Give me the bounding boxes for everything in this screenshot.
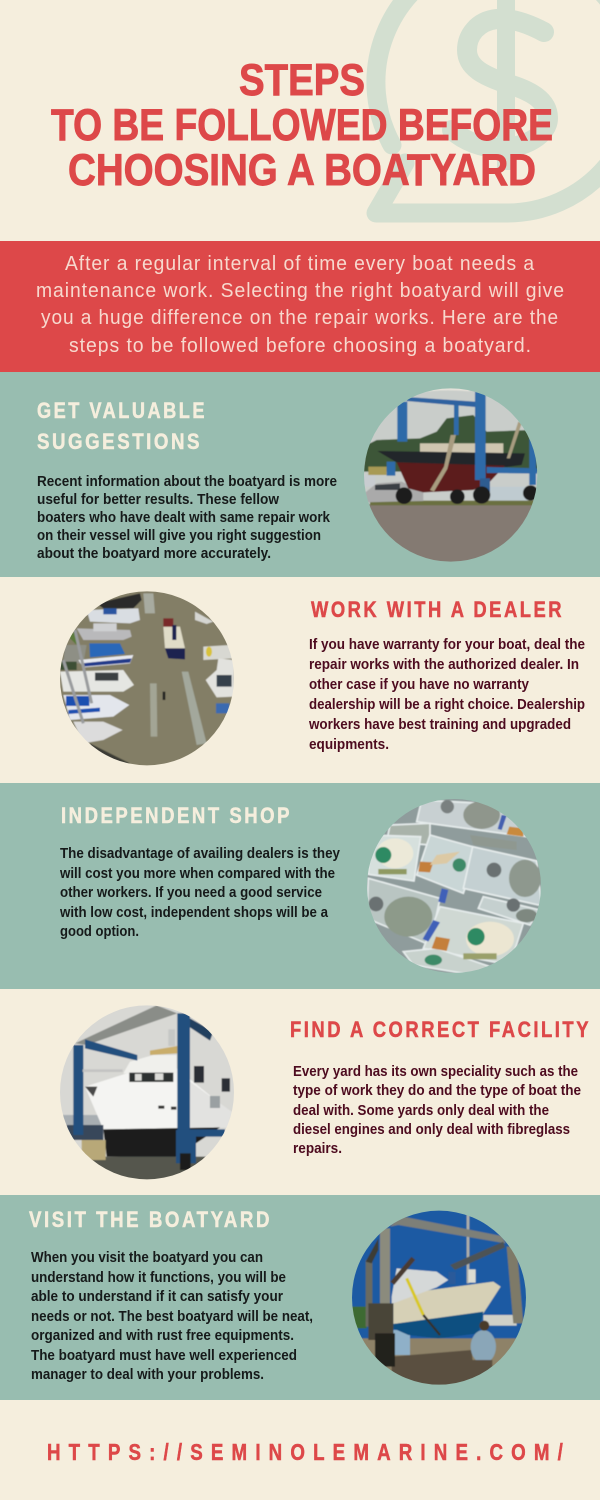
heading: SUGGESTIONS — [37, 429, 202, 454]
body text — [308, 637, 585, 753]
body text: When you visit the boatyard you can — [31, 1250, 263, 1266]
photo: boat on blue lift — [360, 385, 543, 568]
panel: intro — [0, 241, 600, 372]
body text: The disadvantage of availing dealers is they — [60, 846, 340, 862]
body text: If you have warranty for your boat, deal the — [309, 637, 585, 653]
body text: Every yard has its own speciality such as the — [293, 1064, 578, 1080]
body text: needs or not. The best boatyard will be neat, — [31, 1309, 313, 1325]
intro text: After a regular interval of time every boat needs a — [65, 252, 535, 275]
body text: Recent information about the boatyard is more — [37, 474, 337, 490]
icon: dollar speech bubble — [376, 0, 600, 213]
body text: deal with. Some yards only deal with the — [293, 1103, 549, 1119]
panel: independent shop — [0, 783, 600, 989]
body text: repair works with the authorized dealer. In — [309, 657, 579, 673]
intro text: maintenance work. Selecting the right boatyard will give — [36, 279, 565, 302]
title: STEPS — [239, 56, 365, 105]
body text: other workers. If you need a good service — [60, 885, 322, 901]
intro text: steps to be followed before choosing a boatyard. — [69, 334, 532, 357]
photo: aerial view of boatyard — [57, 588, 237, 768]
intro text: you a huge difference on the repair works. Here are the — [41, 306, 559, 329]
intro text — [36, 252, 565, 357]
photo: white motor yacht in lift — [60, 1006, 234, 1180]
heading: GET VALUABLE — [37, 398, 207, 423]
body text: The boatyard must have well experienced — [31, 1348, 297, 1364]
panel: work with a dealer — [60, 591, 584, 766]
body text: boaters who have dealt with same repair work — [37, 510, 331, 526]
title: CHOOSING A BOATYARD — [68, 146, 536, 195]
panel: visit the boatyard — [0, 1195, 600, 1400]
heading — [37, 398, 207, 454]
panel: get valuable suggestions — [0, 372, 600, 577]
body text: with low cost, independent shops will be a — [59, 905, 329, 921]
body text: repairs. — [293, 1141, 342, 1157]
body text: good option. — [60, 924, 139, 940]
heading: VISIT THE BOATYARD — [29, 1207, 272, 1232]
body text — [37, 474, 337, 562]
body text: diesel engines and only deal with fibreglass — [293, 1122, 570, 1138]
body text: about the boatyard more accurately. — [37, 546, 271, 562]
panel: find a correct facility — [60, 1006, 588, 1180]
body text: organized and with rust free equipments. — [31, 1328, 294, 1344]
body text: workers have best training and upgraded — [308, 717, 571, 733]
photo: yacht on slings with man watching — [350, 1208, 532, 1388]
body text: equipments. — [309, 737, 389, 753]
title — [51, 56, 553, 195]
body text — [293, 1064, 581, 1157]
body text — [31, 1250, 313, 1383]
body text: type of work they do and the type of boat the — [293, 1083, 581, 1099]
heading: INDEPENDENT SHOP — [61, 803, 292, 828]
body text: useful for better results. These fellow — [37, 492, 280, 508]
body text: able to understand if it can satisfy your — [31, 1289, 283, 1305]
body text: manager to deal with your problems. — [31, 1367, 264, 1383]
body text — [59, 846, 340, 940]
body text: understand how it functions, you will be — [31, 1270, 286, 1286]
photo: hundred dollar bills — [365, 797, 545, 977]
body text: will cost you more when compared with the — [59, 866, 335, 882]
body text: other case if you have no warranty — [309, 677, 529, 693]
body text: on their vessel will give you right suggestion — [37, 528, 321, 544]
